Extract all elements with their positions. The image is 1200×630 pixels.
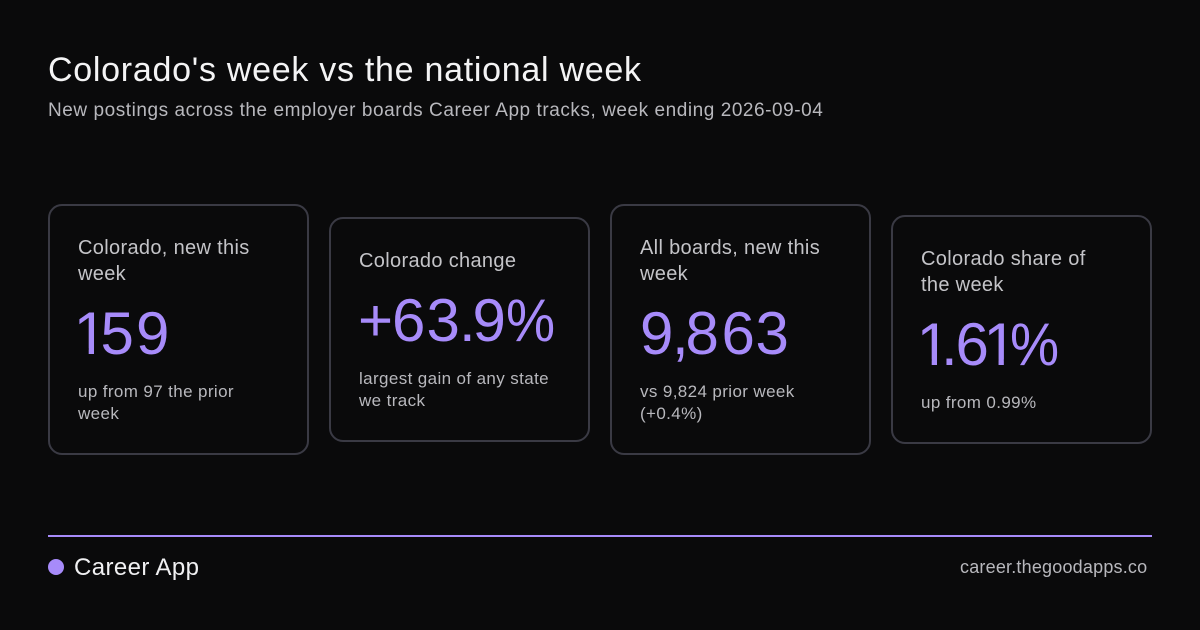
panel note [640, 382, 795, 423]
panel: Colorado new this week [48, 204, 309, 455]
panel label [640, 237, 820, 285]
panel note: (+0.4%) [640, 404, 703, 423]
brand dot icon [48, 559, 64, 575]
footer url: career.thegoodapps.co [960, 557, 1147, 577]
brand name: Career App [74, 554, 199, 581]
subtitle: New postings across the employer boards Career App tracks, week ending 2026-09-04 [48, 100, 823, 121]
stat value: 1 [917, 311, 950, 378]
stat value: 1 [983, 311, 1017, 378]
panel: Colorado change [329, 217, 590, 442]
panel note [78, 382, 234, 423]
stat value: 59 [100, 300, 169, 367]
panel label: All boards, new this [640, 237, 820, 259]
title: Colorado's week vs the national week [48, 51, 642, 89]
panel note: vs 9,824 prior week [640, 382, 795, 401]
panel label: the week [921, 274, 1004, 296]
panel label: week [78, 263, 126, 285]
stat value: 1 [74, 300, 107, 367]
stat value [922, 311, 1059, 378]
panel note: largest gain of any state [359, 369, 549, 388]
panel label: Colorado share of [921, 248, 1086, 270]
panel label: Colorado, new this [78, 237, 250, 259]
panel note: week [78, 404, 119, 423]
panel label [78, 237, 250, 285]
panel label: Colorado change [359, 250, 516, 272]
panel: all boards new this week [610, 204, 871, 455]
panel: Colorado share of the week [891, 215, 1152, 444]
stat value: % [506, 287, 555, 354]
stat value: .6 [941, 311, 983, 378]
panel label: week [640, 263, 688, 285]
panel note: we track [359, 391, 425, 410]
stat value: 9,863 [640, 300, 789, 367]
panel note: up from 0.99% [921, 393, 1036, 412]
panel note [359, 369, 549, 410]
footer rule [48, 535, 1152, 537]
panel note: up from 97 the prior [78, 382, 234, 401]
stat value: % [1010, 311, 1059, 378]
stat value: +63.9 [358, 287, 506, 354]
panel label [921, 248, 1086, 296]
